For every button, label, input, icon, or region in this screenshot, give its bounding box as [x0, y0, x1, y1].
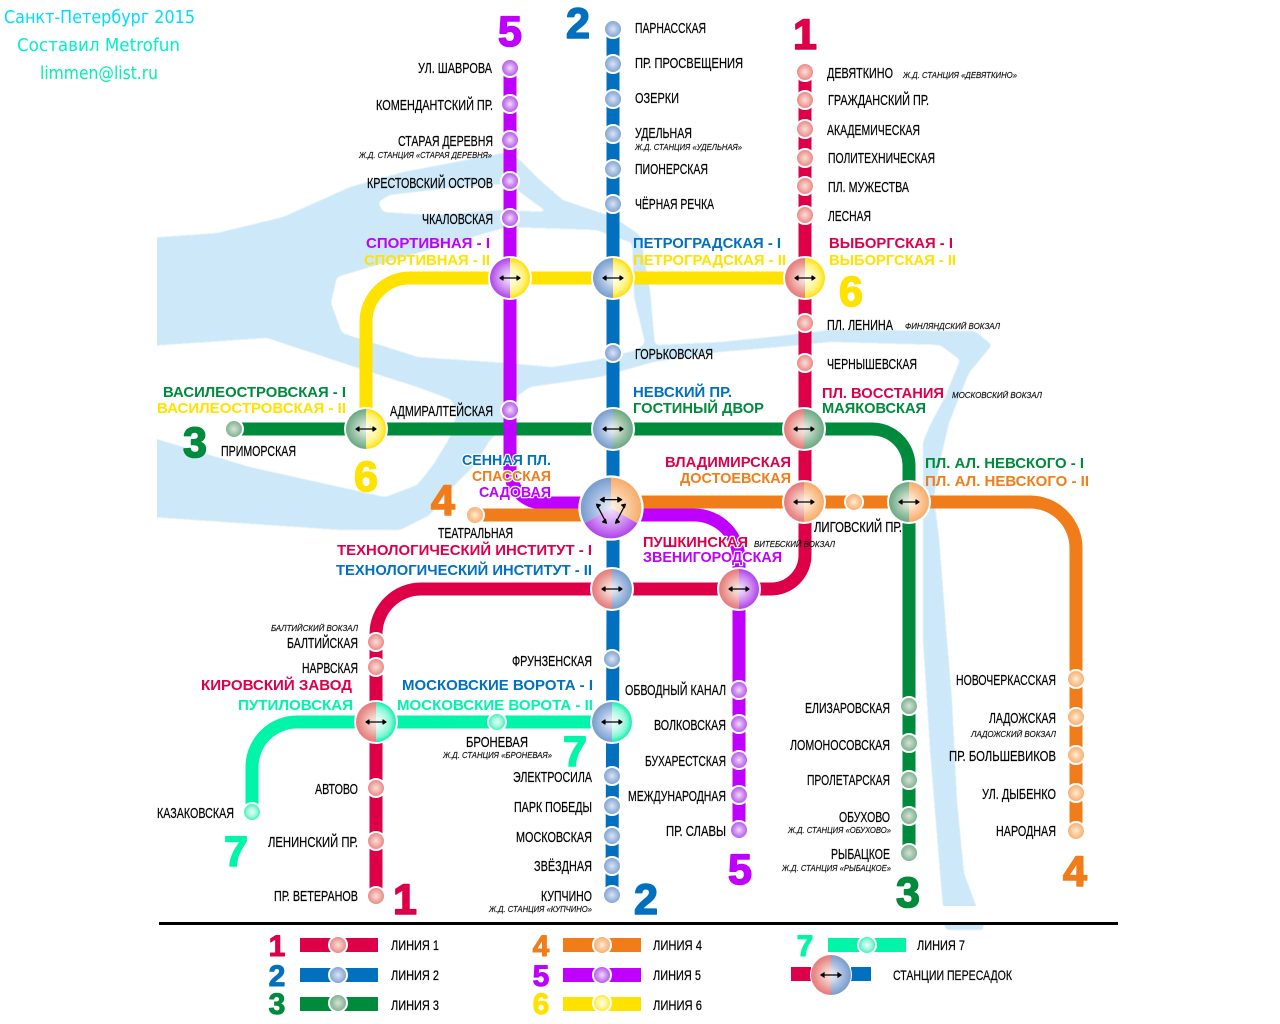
interchange name labels: СПОРТИВНАЯ - II: [364, 252, 490, 269]
line 2 stations: Ж.Д. СТАНЦИЯ «КУПЧИНО»: [488, 905, 593, 914]
line 7 stations: Ж.Д. СТАНЦИЯ «БРОНЕВАЯ»: [442, 751, 553, 760]
interchange name labels: ПЛ. ВОССТАНИЯ: [822, 385, 944, 402]
line number markers: 1: [793, 11, 817, 59]
line number markers: 3: [183, 419, 207, 467]
line 3 stations: [221, 420, 918, 873]
line number markers: 6: [354, 453, 378, 501]
interchange name labels: НЕВСКИЙ ПР.: [633, 383, 732, 401]
interchange stations: [344, 256, 931, 744]
line number markers: [183, 0, 1087, 924]
line number markers: 7: [563, 728, 587, 776]
line number markers: 2: [634, 876, 658, 924]
line 5 stations: МЕЖДУНАРОДНАЯ: [628, 788, 726, 805]
interchange name labels: КИРОВСКИЙ ЗАВОД: [201, 676, 352, 694]
interchange name labels: ПУШКИНСКАЯ: [643, 534, 748, 551]
line 5 stations: КРЕСТОВСКИЙ ОСТРОВ: [367, 174, 493, 192]
line 2 stations: ГОРЬКОВСКАЯ: [635, 346, 713, 363]
line 5 stations: Ж.Д. СТАНЦИЯ «СТАРАЯ ДЕРЕВНЯ»: [358, 151, 493, 160]
interchange name labels: САДОВАЯ: [479, 484, 551, 501]
line 7 stations: КАЗАКОВСКАЯ: [157, 805, 234, 822]
line 3 stations: ПРОЛЕТАРСКАЯ: [807, 772, 890, 789]
line number markers: 2: [566, 0, 590, 48]
legend: [269, 930, 1013, 1021]
line 1 stations: ПОЛИТЕХНИЧЕСКАЯ: [828, 150, 935, 167]
legend: 4: [533, 930, 550, 963]
line 2 stations: [488, 20, 743, 914]
interchange name labels: ПЛ. АЛ. НЕВСКОГО - II: [925, 473, 1089, 490]
interchange name labels: ЗВЕНИГОРОДСКАЯ: [643, 549, 782, 566]
legend: 1: [269, 930, 285, 963]
line 3 stations: Ж.Д. СТАНЦИЯ «ОБУХОВО»: [787, 826, 892, 835]
line 5 stations: УЛ. ШАВРОВА: [418, 60, 492, 77]
line 2 stations: ФРУНЗЕНСКАЯ: [512, 653, 592, 670]
line 2 stations: КУПЧИНО: [541, 888, 592, 905]
line 1 stations: ПЛ. ЛЕНИНА: [827, 317, 893, 334]
railway station notes: [754, 391, 1043, 549]
legend: ЛИНИЯ 1: [391, 937, 439, 953]
line 1 stations: ДЕВЯТКИНО: [827, 65, 893, 82]
line 4 stations: ЛИГОВСКИЙ ПР.: [814, 518, 902, 536]
line 2 stations: ЭЛЕКТРОСИЛА: [513, 769, 592, 786]
line 4 stations: ПР. БОЛЬШЕВИКОВ: [949, 748, 1056, 765]
line 5 stations: БУХАРЕСТСКАЯ: [645, 753, 726, 770]
line 1 stations: БАЛТИЙСКИЙ ВОКЗАЛ: [271, 624, 358, 633]
line number markers: 6: [839, 268, 863, 316]
line 5 stations: КОМЕНДАНТСКИЙ ПР.: [376, 96, 493, 114]
line 1 stations: ЛЕНИНСКИЙ ПР.: [268, 833, 358, 851]
line number markers: 4: [1063, 848, 1087, 896]
line 5 stations: ОБВОДНЫЙ КАНАЛ: [625, 681, 726, 699]
line 3 stations: ОБУХОВО: [839, 809, 890, 826]
interchange name labels: СЕННАЯ ПЛ.: [462, 452, 551, 469]
line 3 stations: Ж.Д. СТАНЦИЯ «РЫБАЦКОЕ»: [781, 864, 892, 873]
line 7 stations: [157, 713, 553, 822]
interchange name labels: ВЫБОРГСКАЯ - II: [829, 252, 956, 269]
legend: 3: [269, 988, 285, 1021]
interchange name labels: ПЕТРОГРАДСКАЯ - II: [633, 252, 786, 269]
legend: ЛИНИЯ 3: [391, 997, 439, 1013]
line 1 stations: НАРВСКАЯ: [302, 660, 358, 677]
header credits: Санкт-Петербург 2015: [4, 7, 195, 28]
line number markers: 7: [224, 828, 248, 876]
interchange name labels: МАЯКОВСКАЯ: [822, 400, 926, 417]
line 1 stations: ГРАЖДАНСКИЙ ПР.: [828, 91, 929, 109]
interchange name labels: ГОСТИНЫЙ ДВОР: [633, 399, 764, 417]
line 2 stations: ПАРНАССКАЯ: [635, 20, 706, 37]
line 2 stations: Ж.Д. СТАНЦИЯ «УДЕЛЬНАЯ»: [634, 143, 743, 152]
legend: ЛИНИЯ 6: [653, 997, 702, 1013]
line 1 stations: АВТОВО: [315, 781, 358, 798]
legend: 6: [533, 988, 549, 1021]
legend: 7: [797, 930, 813, 963]
interchange name labels: ТЕХНОЛОГИЧЕСКИЙ ИНСТИТУТ - I: [337, 541, 592, 559]
header credits: limmen@list.ru: [40, 63, 158, 84]
interchange name labels: ВЫБОРГСКАЯ - I: [829, 235, 953, 252]
interchange name labels: ВЛАДИМИРСКАЯ: [665, 454, 791, 471]
interchange name labels: СПАССКАЯ: [472, 468, 551, 485]
line 1 stations: ЧЕРНЫШЕВСКАЯ: [827, 356, 917, 373]
interchange name labels: ТЕХНОЛОГИЧЕСКИЙ ИНСТИТУТ - II: [336, 561, 592, 579]
interchange name labels: ВАСИЛЕОСТРОВСКАЯ - II: [157, 400, 346, 417]
line number markers: 5: [728, 846, 752, 894]
line 1 stations: ЛЕСНАЯ: [828, 208, 871, 225]
line 5 stations: ВОЛКОВСКАЯ: [654, 717, 726, 734]
line 2 stations: ЧЁРНАЯ РЕЧКА: [635, 196, 714, 213]
line number markers: 5: [498, 8, 522, 56]
railway station notes: ВИТЕБСКИЙ ВОКЗАЛ: [754, 540, 835, 549]
legend: 2: [269, 960, 285, 993]
line 3 stations: ПРИМОРСКАЯ: [221, 443, 296, 460]
interchange name labels: СПОРТИВНАЯ - I: [366, 235, 490, 252]
line 4 stations: НАРОДНАЯ: [996, 823, 1056, 840]
legend: СТАНЦИИ ПЕРЕСАДОК: [893, 967, 1013, 983]
interchange name labels: МОСКОВСКИЕ ВОРОТА - II: [397, 697, 593, 714]
interchange name labels: МОСКОВСКИЕ ВОРОТА - I: [402, 677, 593, 694]
line 4 stations: ТЕАТРАЛЬНАЯ: [438, 525, 513, 542]
line 1 stations: ПР. ВЕТЕРАНОВ: [274, 888, 358, 905]
line 2 stations: ЗВЁЗДНАЯ: [534, 858, 592, 875]
legend: ЛИНИЯ 2: [391, 967, 439, 983]
legend: ЛИНИЯ 7: [917, 937, 965, 953]
line 1 stations: [268, 63, 1018, 905]
legend: 5: [533, 960, 549, 993]
line 4 stations: УЛ. ДЫБЕНКО: [982, 786, 1056, 803]
interchange name labels: [157, 235, 1089, 714]
line 2 stations: МОСКОВСКАЯ: [516, 829, 592, 846]
line 3 stations: РЫБАЦКОЕ: [831, 846, 890, 863]
line 2 stations: УДЕЛЬНАЯ: [635, 125, 692, 142]
line 5 stations: ПР. СЛАВЫ: [666, 823, 726, 840]
line 1 stations: БАЛТИЙСКАЯ: [287, 634, 358, 652]
line 4 stations: [438, 493, 1085, 840]
line number markers: 4: [431, 477, 455, 525]
interchange name labels: ПУТИЛОВСКАЯ: [238, 697, 353, 714]
line 1 stations: ПЛ. МУЖЕСТВА: [828, 179, 909, 196]
line 1 stations: АКАДЕМИЧЕСКАЯ: [827, 122, 920, 139]
railway station notes: МОСКОВСКИЙ ВОКЗАЛ: [952, 391, 1043, 400]
line 5 stations: ЧКАЛОВСКАЯ: [422, 211, 493, 228]
interchange name labels: ПЛ. АЛ. НЕВСКОГО - I: [925, 455, 1084, 472]
legend: ЛИНИЯ 4: [653, 937, 702, 953]
line 2 stations: ПР. ПРОСВЕЩЕНИЯ: [635, 55, 743, 72]
line 1 stations: Ж.Д. СТАНЦИЯ «ДЕВЯТКИНО»: [902, 71, 1018, 80]
line number markers: 3: [896, 869, 920, 917]
line 7 stations: БРОНЕВАЯ: [466, 734, 528, 751]
interchange name labels: ДОСТОЕВСКАЯ: [680, 470, 791, 487]
line 3 stations: ЛОМОНОСОВСКАЯ: [790, 737, 890, 754]
line 2 stations: ПАРК ПОБЕДЫ: [514, 799, 592, 816]
line 4 stations: ЛАДОЖСКИЙ ВОКЗАЛ: [970, 730, 1057, 739]
line 4 stations: ЛАДОЖСКАЯ: [989, 710, 1056, 727]
interchange name labels: ПЕТРОГРАДСКАЯ - I: [633, 235, 781, 252]
line 2 stations: ПИОНЕРСКАЯ: [635, 161, 708, 178]
line 2 stations: ОЗЕРКИ: [635, 90, 679, 107]
metro line tracks: [234, 29, 1076, 896]
legend: ЛИНИЯ 5: [653, 967, 701, 983]
header credits: Составил Metrofun: [17, 35, 180, 56]
line 3 stations: ЕЛИЗАРОВСКАЯ: [805, 700, 890, 717]
header credits: [4, 7, 195, 84]
interchange name labels: ВАСИЛЕОСТРОВСКАЯ - I: [163, 384, 346, 401]
line 5 stations: АДМИРАЛТЕЙСКАЯ: [390, 402, 493, 420]
line 5 stations: СТАРАЯ ДЕРЕВНЯ: [398, 133, 493, 150]
line number markers: 1: [393, 876, 417, 924]
triple interchange: Sennaya, Spasskaya, Sadovaya: [578, 475, 644, 541]
line 5 stations: [358, 59, 748, 840]
line 1 stations: ФИНЛЯНДСКИЙ ВОКЗАЛ: [905, 322, 1001, 331]
line 4 stations: НОВОЧЕРКАССКАЯ: [956, 672, 1056, 689]
